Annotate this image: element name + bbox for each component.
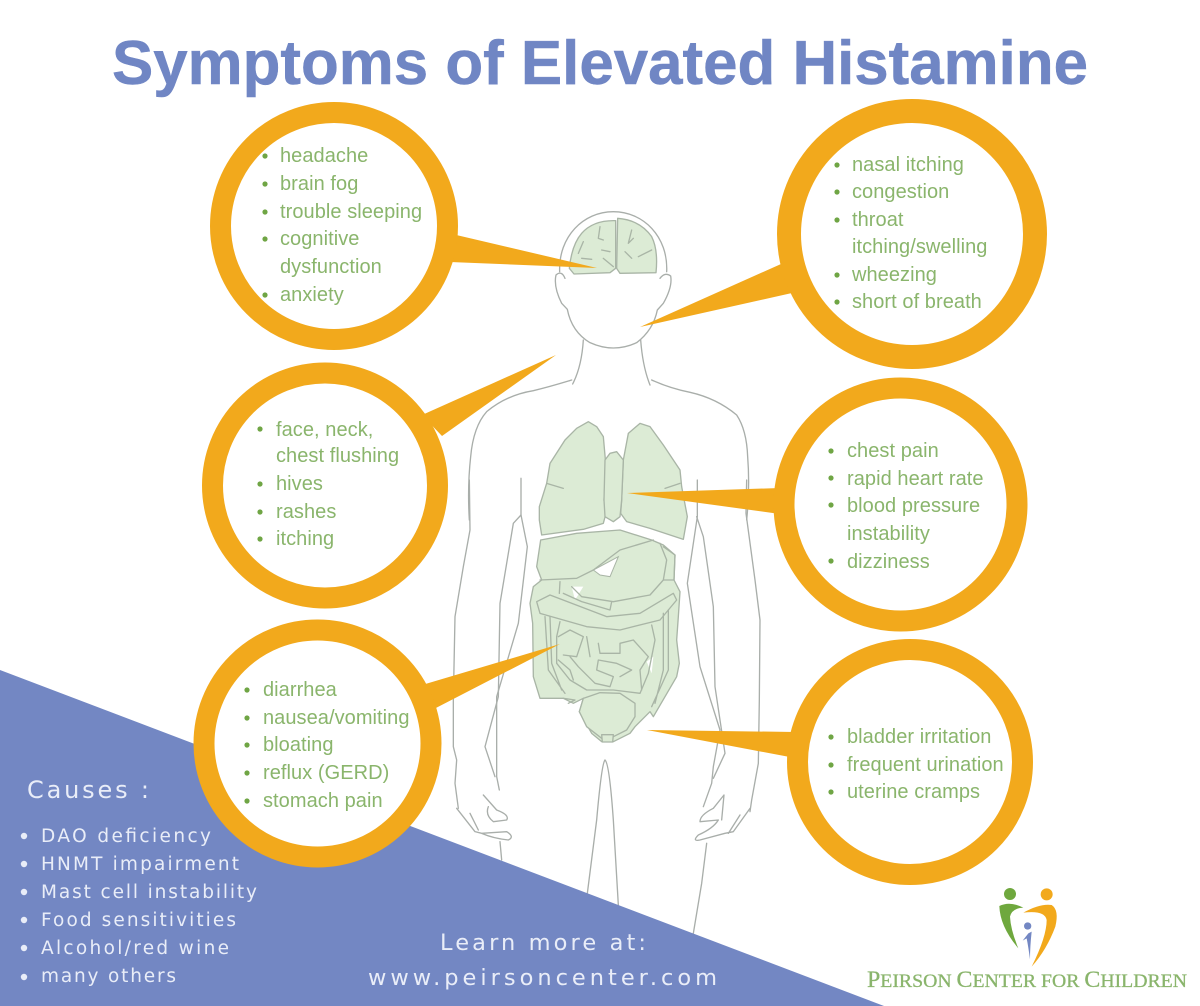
pointer [422, 355, 556, 436]
ring [204, 630, 431, 857]
causes list: Mast cell instability [41, 882, 257, 903]
ring [212, 373, 438, 598]
pointer [647, 730, 795, 758]
brain [569, 218, 657, 274]
pointer [450, 234, 597, 268]
symptom list: blood pressure [847, 495, 980, 517]
symptom list: rapid heart rate [847, 468, 984, 490]
symptom list: nasal itching [852, 154, 964, 176]
ring [789, 111, 1035, 357]
ring [784, 388, 1017, 621]
lungs and heart [539, 422, 687, 539]
symptom list [828, 440, 984, 573]
symptom list: bladder irritation [847, 726, 992, 748]
symptom list: hives [276, 473, 323, 495]
gaps between organs [593, 557, 618, 577]
body outline: head and neck [469, 212, 749, 520]
causes list [21, 826, 257, 987]
pointer [627, 488, 780, 514]
symptom list: face, neck, [276, 419, 373, 441]
ring [798, 650, 1022, 874]
transverse colon [537, 593, 677, 630]
learn more link text [368, 930, 717, 991]
symptom list: dysfunction [280, 256, 382, 278]
ring [220, 112, 448, 340]
symptom list: itching/swelling [852, 236, 987, 258]
causes list: many others [41, 966, 176, 987]
symptom list [834, 154, 987, 313]
symptom list: rashes [276, 501, 336, 523]
organs [530, 218, 687, 742]
symptom list: bloating [263, 734, 334, 756]
symptom list: instability [847, 523, 930, 545]
logo wordmark: PEIRSON CENTER FOR CHILDREN [867, 967, 1187, 992]
symptom list: brain fog [280, 173, 358, 195]
symptom list: reflux (GERD) [263, 762, 389, 784]
bladder [579, 693, 635, 738]
symptom list: headache [280, 145, 368, 167]
right hand [695, 795, 750, 840]
callout: nose and throat symptoms [640, 111, 1035, 357]
pointer [640, 260, 792, 327]
symptom list: trouble sleeping [280, 201, 422, 223]
logo icon: family heart [999, 888, 1057, 967]
logo: Peirson Center for Children [867, 888, 1187, 992]
liver, stomach and spleen lines [540, 540, 675, 610]
symptom list: throat [852, 209, 904, 231]
symptom list: congestion [852, 181, 949, 203]
symptom list: chest flushing [276, 445, 399, 467]
symptom list: cognitive [280, 228, 359, 250]
symptom list: chest pain [847, 440, 939, 462]
callout: bladder symptoms [647, 650, 1022, 874]
symptom list [262, 145, 422, 306]
callout: digestive symptoms [204, 630, 560, 857]
symptom list: frequent urination [847, 754, 1004, 776]
symptom list: short of breath [852, 291, 982, 313]
learn more link text: Learn more at: [440, 930, 646, 956]
callout: heart symptoms [627, 388, 1017, 621]
symptom list: stomach pain [263, 790, 383, 812]
causes heading: Causes : [27, 776, 149, 804]
causes list: Food sensitivities [41, 910, 236, 931]
symptom list: anxiety [280, 284, 344, 306]
causes list: Alcohol/red wine [41, 938, 229, 959]
callout: head symptoms [220, 112, 597, 340]
blue corner panel [0, 670, 884, 1006]
symptom list: dizziness [847, 551, 930, 573]
callout: skin symptoms [212, 355, 556, 598]
causes list: DAO deficiency [41, 826, 211, 847]
symptom list: itching [276, 528, 334, 550]
left hand [457, 795, 511, 840]
symptom list: diarrhea [263, 679, 338, 701]
body outline: arms, torso, legs [453, 478, 760, 933]
abdomen silhouette [530, 530, 680, 742]
small intestine [557, 622, 655, 693]
symptom list: nausea/vomiting [263, 707, 410, 729]
symptom list: wheezing [851, 264, 937, 286]
causes list: HNMT impairment [41, 854, 239, 875]
abdominal organs [530, 530, 680, 742]
title: Symptoms of Elevated Histamine [112, 29, 1088, 98]
symptom list [244, 679, 410, 812]
symptom list [257, 419, 399, 550]
ascending and descending colon [545, 610, 668, 707]
symptom list [828, 726, 1004, 803]
pointer [422, 644, 560, 710]
learn more link text: www.peirsoncenter.com [368, 965, 717, 991]
human body outline with organs [453, 212, 760, 933]
symptom list: uterine cramps [847, 781, 980, 803]
